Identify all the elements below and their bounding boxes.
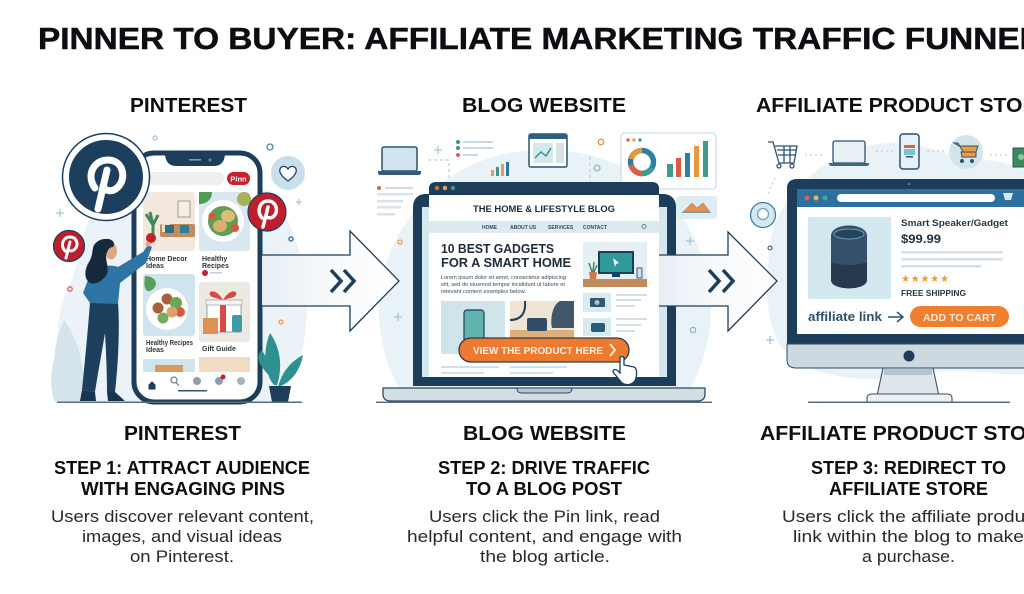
analytics card: [621, 133, 716, 189]
screen: [797, 189, 1024, 334]
card: healthy recipes ideas: Ideas: [146, 347, 164, 354]
card: gift guide: Gift Guide: [202, 346, 236, 353]
free shipping: FREE SHIPPING: [901, 289, 966, 298]
card: home decor: Home Decor: [146, 256, 188, 263]
icon: small laptop: [378, 147, 421, 175]
browser bar: [797, 189, 1024, 207]
blog nav: SERVICES: [548, 225, 574, 231]
pin button: [227, 172, 250, 185]
add to cart button: ADD TO CART: [923, 312, 997, 324]
card: home decor: [143, 192, 195, 270]
text block: step 1: PINTEREST: [124, 422, 241, 445]
article heading: FOR A SMART HOME: [441, 256, 571, 270]
article heading: 10 BEST GADGETS: [441, 242, 554, 256]
decorative leaf: [51, 320, 83, 402]
text block: step 2: TO A BLOG POST: [466, 478, 623, 499]
icon: cart badge: [949, 135, 983, 169]
text block: step 1: Users discover relevant content,: [51, 507, 314, 526]
blog name: THE HOME & LIFESTYLE BLOG: [473, 204, 615, 215]
ground line: [57, 402, 302, 403]
text block: step 2: BLOG WEBSITE: [463, 422, 626, 445]
monitor stand: [808, 368, 1010, 403]
text block: step 3: Users click the affiliate product: [782, 507, 1024, 526]
text block: step 1: on Pinterest.: [130, 547, 234, 566]
person: [80, 239, 152, 401]
text block: step 1: [51, 422, 314, 566]
text block: step 2: Users click the Pin link, read: [429, 507, 660, 526]
icon: money: [1013, 148, 1024, 167]
mountain chart card: [676, 196, 717, 219]
power button: [904, 350, 914, 362]
text block: step 2: helpful content, and engage with: [407, 527, 682, 546]
chevrons: [709, 270, 733, 292]
large pinterest badge: [62, 134, 150, 220]
product name: Smart Speaker/Gadget: [901, 218, 1009, 229]
star rating: ★★★★★: [901, 274, 949, 285]
arrow to button: [888, 312, 903, 322]
article heading: [441, 242, 571, 270]
laptop: [376, 182, 712, 403]
icon: laptop: [829, 141, 869, 166]
small pinterest badge left: [54, 230, 84, 262]
small pinterest badge right: [248, 193, 286, 231]
nav icons: [149, 374, 245, 392]
arrow: pinterest to blog: [262, 231, 399, 331]
donut chart: [630, 150, 654, 174]
connector dots: [768, 151, 1007, 194]
column heading: blog website: BLOG WEBSITE: [462, 94, 626, 117]
article text: elit, sed do eiusmod tempor incididunt ut labore et: [441, 282, 566, 288]
search bar: [146, 172, 224, 185]
potted plant: [258, 333, 303, 402]
text block: step 1: images, and visual ideas: [82, 527, 282, 546]
article text: Lorem ipsum dolor sit amet, consectetur adipiscing: [441, 275, 566, 281]
blog nav: ABOUT US: [510, 225, 537, 231]
phone: [134, 153, 260, 402]
pin button: Pinn: [230, 174, 247, 184]
text block: step 2: STEP 2: DRIVE TRAFFIC: [438, 457, 650, 478]
article text lines: [441, 366, 567, 374]
article text: relevant content examples below.: [441, 289, 526, 295]
chevrons: [331, 270, 354, 292]
text block: step 1: STEP 1: ATTRACT AUDIENCE: [54, 457, 310, 478]
call to action button: [459, 338, 629, 362]
text block: step 3: STEP 3: REDIRECT TO: [811, 457, 1006, 478]
background blob: [767, 143, 1024, 379]
text block: step 2: [407, 422, 682, 566]
list decoration top: [428, 140, 590, 182]
bar chart: [667, 141, 708, 177]
panel: pinterest illustration: [51, 94, 307, 403]
side image: desk: [583, 242, 647, 287]
text block: step 3: a purchase.: [862, 547, 955, 566]
decorative dots: [56, 136, 302, 324]
blog nav: HOME: [482, 225, 498, 231]
blog nav: [429, 221, 659, 233]
text block: step 2: the blog article.: [480, 547, 610, 566]
card: gift guide: [199, 282, 250, 353]
text block: step 3: AFFILIATE STORE: [829, 478, 988, 499]
icon: chart window: [529, 134, 567, 167]
title: PINNER TO BUYER: AFFILIATE MARKETING TRAFFIC FUNNEL: [38, 22, 1024, 56]
article images: [441, 301, 574, 354]
icon: heart badge: [271, 156, 305, 190]
panel: affiliate product store illustration: [750, 94, 1024, 403]
blog nav: CONTACT: [583, 225, 607, 231]
cropped cards: [143, 357, 250, 372]
text block: step 1: WITH ENGAGING PINS: [81, 478, 285, 499]
text block: step 3: link within the blog to make: [793, 527, 1024, 546]
panel: blog website illustration: [376, 94, 717, 403]
card: home decor: Ideas: [146, 263, 164, 270]
column heading: pinterest: PINTEREST: [130, 94, 247, 117]
card: healthy recipes: [199, 192, 251, 276]
hand cursor icon: [613, 356, 637, 385]
smart speaker: [831, 226, 867, 288]
description lines: [901, 251, 1003, 268]
background circle: [379, 150, 711, 402]
product image: [808, 217, 891, 299]
laptop base: [376, 388, 712, 403]
call to action button: VIEW THE PRODUCT HERE: [473, 345, 603, 357]
card: healthy recipes ideas: Healthy Recipes: [146, 340, 193, 347]
arrow: blog to store: [659, 232, 777, 331]
affiliate link label: affiliate link: [808, 309, 883, 324]
background blob: [57, 190, 307, 402]
article text: [441, 275, 566, 295]
card: healthy recipes ideas: [143, 274, 195, 354]
icon: phone: [900, 134, 919, 169]
icon: ring: [750, 202, 776, 228]
list decoration left: [377, 186, 413, 216]
icon: shopping cart: [768, 142, 797, 168]
card: healthy recipes: Recipes: [202, 263, 229, 270]
add to cart button: [910, 306, 1009, 327]
browser window: [429, 182, 659, 377]
card: healthy recipes: Healthy: [202, 256, 227, 263]
monitor: [787, 179, 1024, 403]
price: $99.99: [901, 232, 941, 246]
text block: step 3: [760, 422, 1024, 566]
side items: [583, 293, 647, 336]
